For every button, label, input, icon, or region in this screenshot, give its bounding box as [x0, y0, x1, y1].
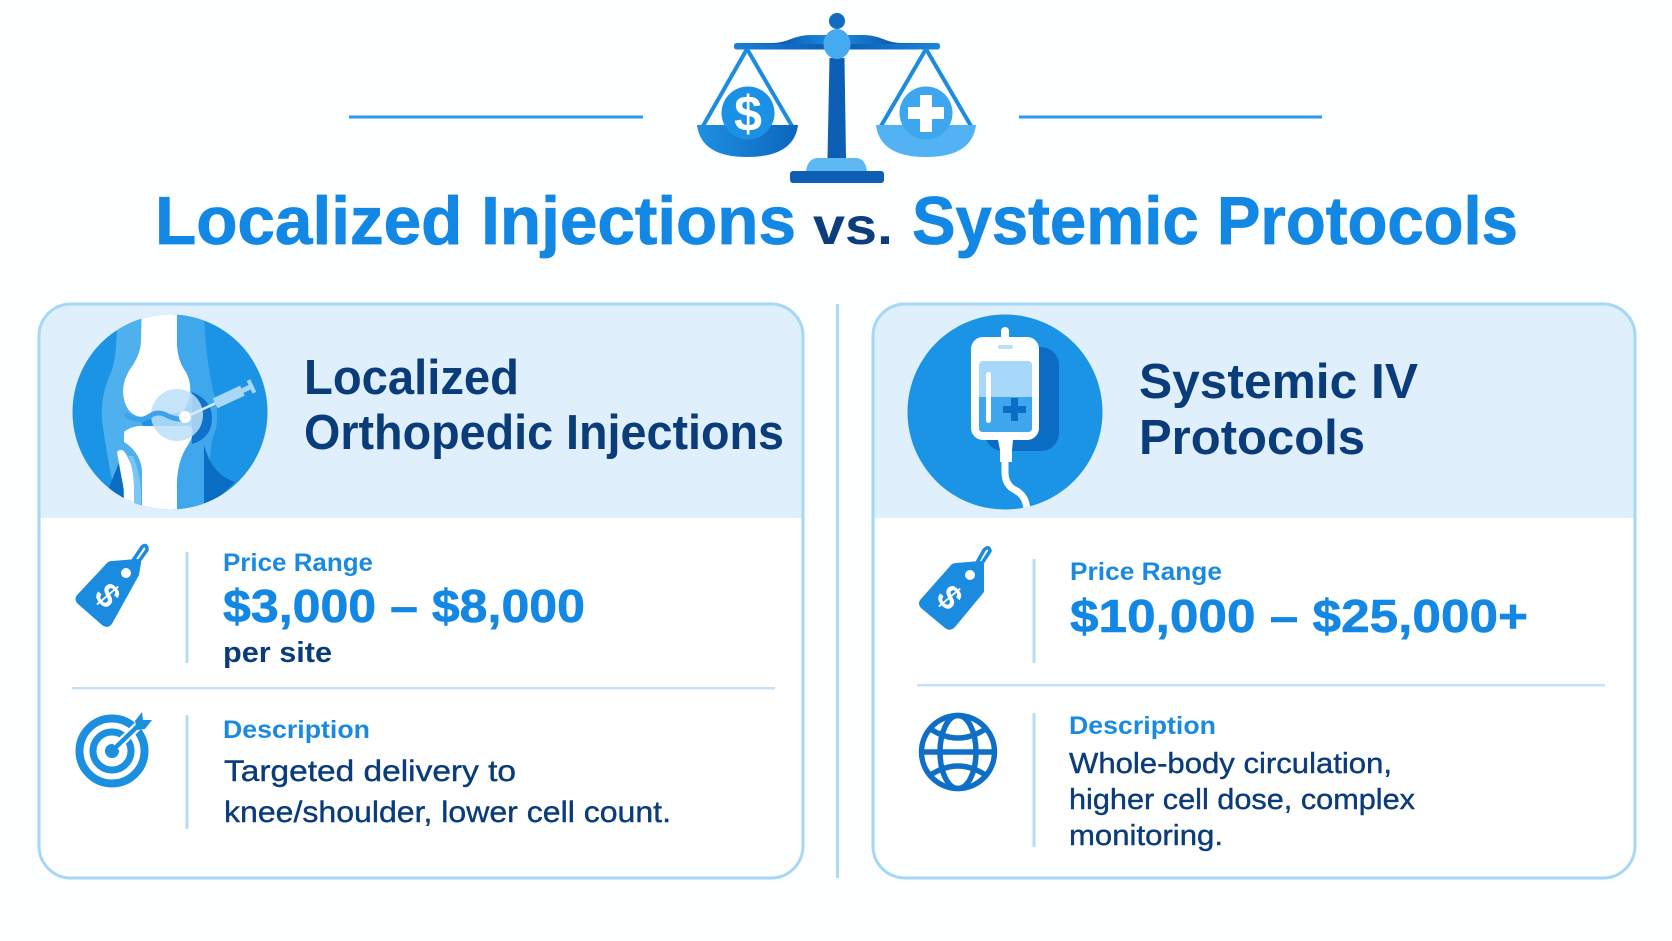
panel heading: Protocols	[1139, 411, 1365, 465]
price range block: Price Range	[1070, 558, 1222, 586]
panel heading	[304, 351, 784, 460]
title: Localized Injections	[155, 183, 796, 259]
price range block	[223, 549, 585, 669]
coin: dollar	[722, 86, 774, 142]
description block: Description	[223, 716, 370, 744]
description block: monitoring.	[1069, 820, 1223, 852]
icon: price tag	[76, 546, 147, 627]
description block	[223, 716, 671, 829]
price range block	[1070, 558, 1528, 642]
description block: Description	[1069, 712, 1216, 740]
panel heading: Systemic IV	[1139, 355, 1418, 409]
panel: systemic protocols	[873, 304, 1635, 878]
panel heading	[1139, 355, 1418, 465]
header line right	[1019, 116, 1322, 118]
icon: target	[80, 712, 152, 784]
price range block: per site	[223, 637, 332, 669]
center divider	[836, 304, 839, 878]
price range block: $3,000 – $8,000	[223, 580, 585, 632]
icon: price tag: $	[929, 578, 970, 617]
title: Systemic Protocols	[912, 183, 1518, 259]
panel heading: Localized	[304, 351, 519, 405]
panel heading: Orthopedic Injections	[304, 406, 784, 460]
coin: medical cross	[900, 86, 952, 140]
description block	[1069, 712, 1416, 852]
title: vs.	[813, 198, 893, 256]
description block: Whole-body circulation,	[1069, 748, 1392, 780]
price range block: Price Range	[223, 549, 373, 577]
coin: dollar: $	[734, 86, 762, 142]
scales icon	[349, 13, 1322, 183]
icon: price tag: $	[87, 576, 128, 615]
description block: knee/shoulder, lower cell count.	[224, 796, 671, 829]
price range block: $10,000 – $25,000+	[1070, 590, 1528, 642]
icon: price tag	[919, 548, 990, 630]
title	[155, 183, 1518, 259]
header line left	[349, 116, 643, 118]
description block: higher cell dose, complex	[1069, 784, 1416, 816]
illustration: IV bag	[908, 314, 1102, 512]
icon: globe	[921, 716, 995, 788]
description block: Targeted delivery to	[224, 755, 516, 788]
illustration: knee joint injection	[72, 314, 268, 510]
panel: localized injections	[39, 300, 803, 878]
